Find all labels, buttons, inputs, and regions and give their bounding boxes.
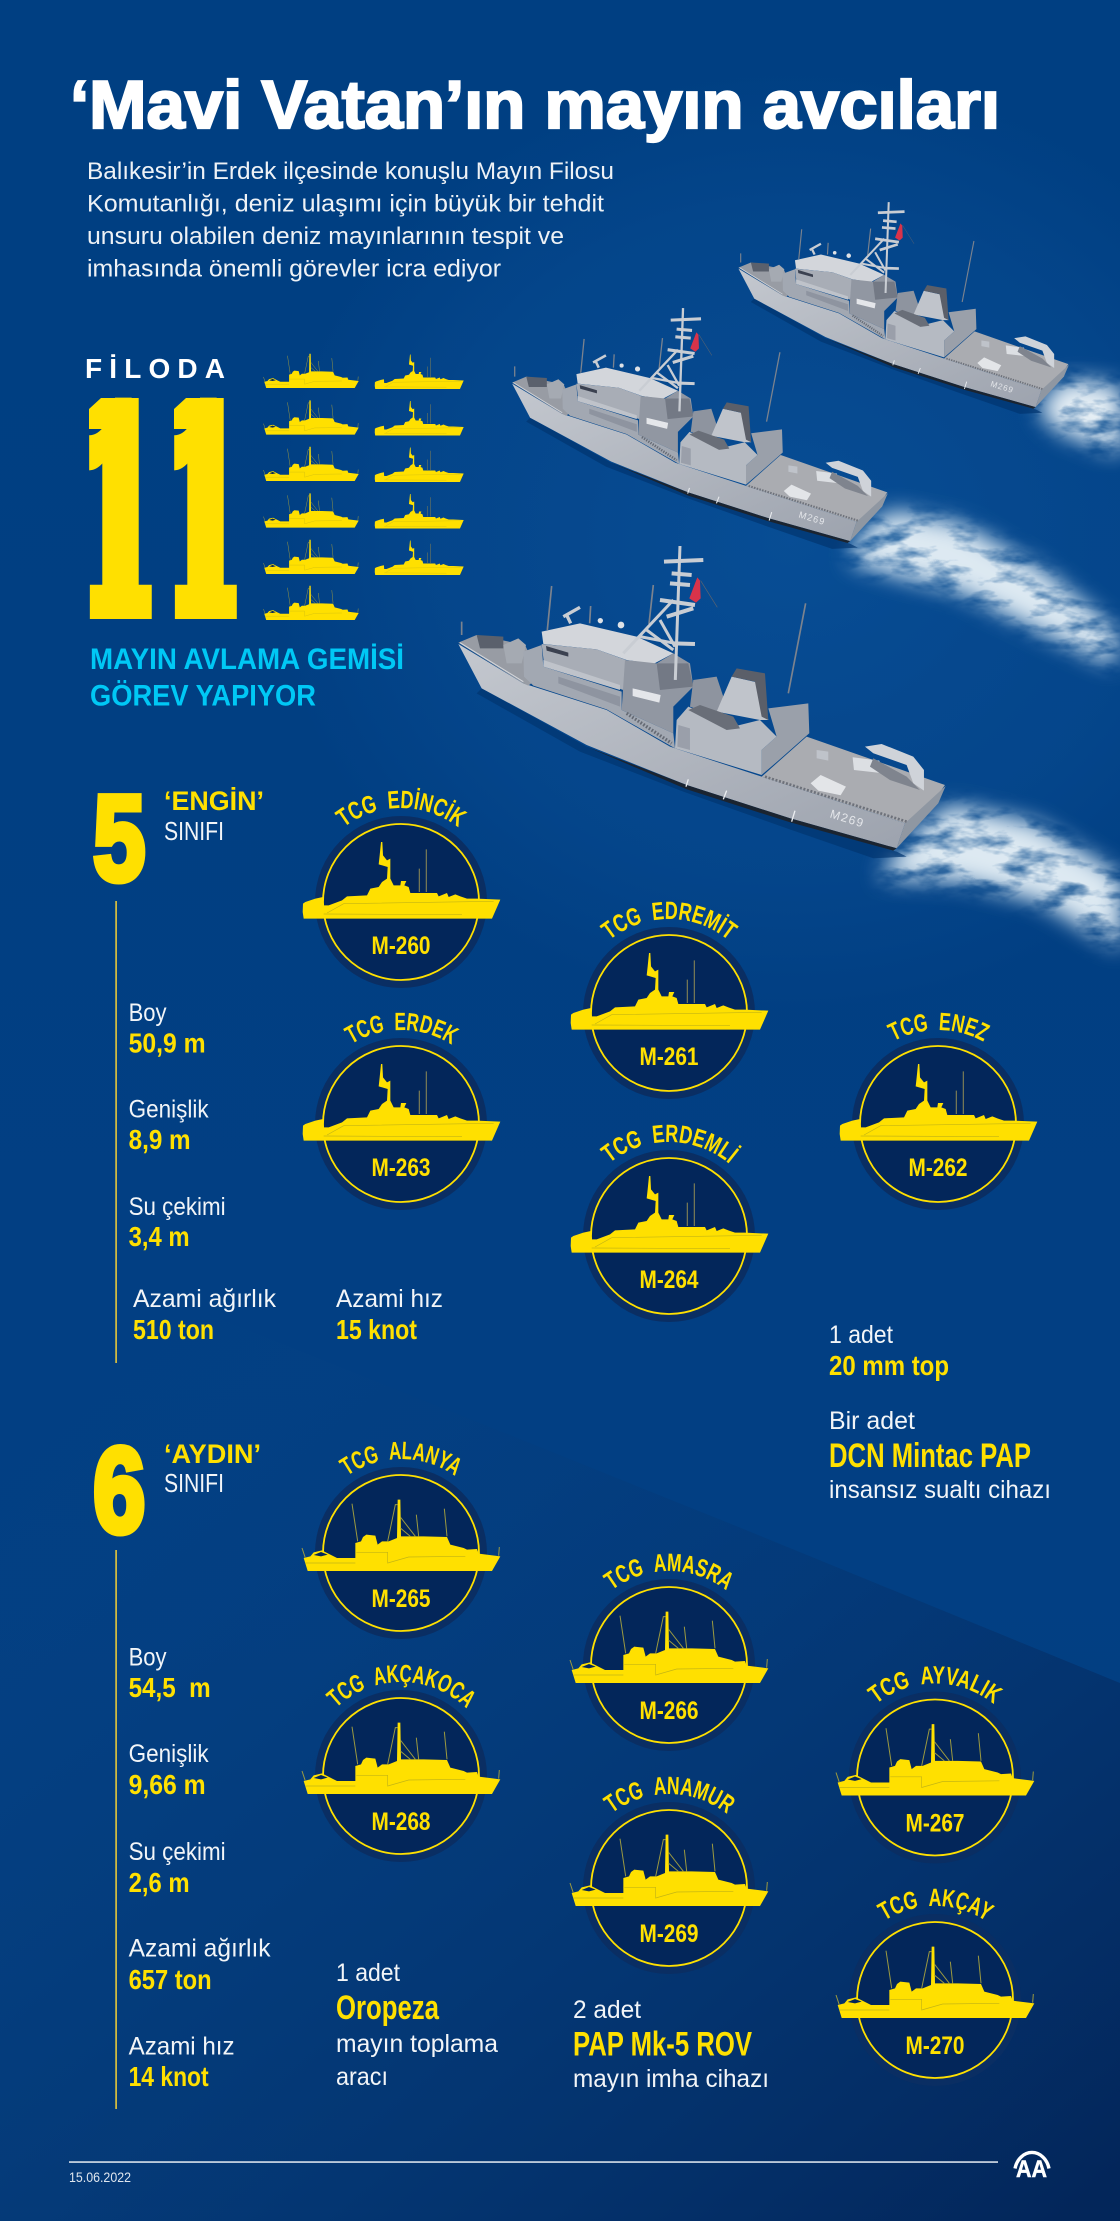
medallion: M-263 xyxy=(302,1012,500,1210)
lower right dark panel xyxy=(0,1230,1120,2221)
medallion: M-268: TCG AKÇAKOCA xyxy=(325,1664,474,1708)
equipment: Oropeza: aracı xyxy=(336,2063,388,2091)
Engin specifications: 50,9 m xyxy=(129,1027,206,1058)
medallion: M-268: M-268 xyxy=(372,1808,431,1836)
Engin specifications: 510 ton xyxy=(133,1314,214,1345)
armament: DCN Mintac PAP xyxy=(829,1407,1051,1504)
panel: Aydin class heading xyxy=(93,1422,261,1558)
fleet caption xyxy=(90,643,404,712)
date: 15.06.2022 xyxy=(69,2169,131,2185)
medallion: M-261 xyxy=(570,902,768,1099)
medallion: M-262: TCG ENEZ xyxy=(886,1012,990,1042)
Aydin specifications: Boy xyxy=(129,1644,167,1672)
equipment: Oropeza: Oropeza xyxy=(336,1989,440,2027)
Engin specifications xyxy=(129,999,443,1345)
logo: AA: AA xyxy=(1016,2156,1047,2183)
medallion: M-266 xyxy=(570,1554,768,1751)
intro text xyxy=(87,158,614,282)
medallion: M-261: TCG EDREMİT xyxy=(600,902,739,938)
medallion: M-267: TCG AYVALIK xyxy=(866,1666,1004,1704)
Aydin specifications: Genişlik xyxy=(129,1740,209,1768)
medallion: M-262 xyxy=(840,1012,1038,1210)
Aydin specifications: 14 knot xyxy=(129,2061,209,2092)
intro text: Komutanlığı, deniz ulaşımı için büyük bir tehdit xyxy=(87,190,604,218)
Engin specifications: Genişlik xyxy=(129,1096,209,1124)
equipment: PAP Mk-5 ROV: 2 adet xyxy=(573,1996,641,2024)
medallion: M-267: M-267 xyxy=(906,1810,964,1838)
panel: Aydin class heading: SINIFI xyxy=(164,1468,224,1498)
intro text: unsuru olabilen deniz mayınlarının tespit ve xyxy=(87,223,564,250)
armament: 20 mm gun xyxy=(829,1321,949,1381)
medallion: M-267 xyxy=(836,1666,1034,1864)
ship photo: M267 xyxy=(738,202,1069,414)
medallion: M-264 xyxy=(570,1124,768,1322)
medallion: M-262: M-262 xyxy=(908,1154,968,1182)
medallion: M-265: M-265 xyxy=(372,1585,431,1613)
intro text: imhasında önemli görevler icra ediyor xyxy=(87,256,501,282)
medallion: M-260: M-260 xyxy=(372,932,430,960)
equipment: PAP Mk-5 ROV: mayın imha cihazı xyxy=(573,2065,769,2093)
medallion: M-265 xyxy=(302,1442,500,1639)
medallion: M-260 xyxy=(302,788,500,988)
wake: ship two xyxy=(850,512,1114,665)
armament: DCN Mintac PAP: DCN Mintac PAP xyxy=(829,1437,1031,1475)
medallion: M-269: TCG ANAMUR xyxy=(602,1776,734,1814)
wake: ship one xyxy=(1039,380,1120,453)
medallion: M-269 xyxy=(570,1776,768,1974)
panel: Aydin class heading: ‘AYDIN’ xyxy=(164,1439,261,1469)
footer rule xyxy=(69,2161,998,2163)
Engin specifications: 8,9 m xyxy=(129,1124,191,1155)
Engin specifications: Su çekimi xyxy=(129,1193,226,1221)
Aydin specifications: 54,5 m xyxy=(129,1672,211,1703)
medallion: M-260: TCG EDİNCİK xyxy=(334,788,468,828)
panel: Engin class heading: 5 xyxy=(93,770,145,906)
panel: Engin class heading: SINIFI xyxy=(164,816,224,846)
Engin specifications: Azami hız xyxy=(336,1285,443,1313)
Aydin specifications: Azami hız xyxy=(129,2032,235,2060)
armament: DCN Mintac PAP: insansız sualtı cihazı xyxy=(829,1476,1051,1504)
Aydin specifications: Azami ağırlık xyxy=(129,1934,271,1962)
medallion: M-270: TCG AKÇAY xyxy=(876,1888,995,1919)
Aydin specifications xyxy=(129,1644,271,2092)
panel: Engin class heading: ‘ENGİN’ xyxy=(164,786,264,816)
medallion: M-263: TCG ERDEK xyxy=(343,1012,460,1045)
Engin specifications: Boy xyxy=(129,999,167,1027)
equipment: PAP Mk-5 ROV xyxy=(573,1996,769,2093)
intro text: Balıkesir’in Erdek ilçesinde konuşlu Mayın Filosu xyxy=(87,158,614,185)
medallion: M-266: TCG AMASRA xyxy=(602,1554,732,1590)
medallion: M-264: TCG ERDEMLİ xyxy=(600,1124,742,1164)
panel: Engin class heading xyxy=(93,770,264,906)
medallion: M-270 xyxy=(836,1888,1034,2079)
panel: Aydin class heading: 6 xyxy=(93,1422,145,1558)
Engin specifications: 15 knot xyxy=(336,1314,417,1345)
medallion: M-264: M-264 xyxy=(640,1266,699,1294)
fleet label: FİLODA xyxy=(85,353,225,384)
big number 11: 11 xyxy=(81,340,242,721)
sea glow behind ships xyxy=(270,70,1120,1010)
armament: 20 mm gun: 20 mm top xyxy=(829,1350,949,1381)
armament: DCN Mintac PAP: Bir adet xyxy=(829,1407,915,1435)
ship photo: M269 xyxy=(458,546,946,858)
wake: ship three xyxy=(880,806,1120,948)
Engin specifications: 3,4 m xyxy=(129,1221,190,1252)
Aydin specifications: Su çekimi xyxy=(129,1838,226,1866)
fleet caption: GÖREV YAPIYOR xyxy=(90,680,316,712)
wake haze xyxy=(850,380,1120,948)
Aydin specifications: 657 ton xyxy=(129,1964,212,1995)
armament: 20 mm gun: 1 adet xyxy=(829,1321,893,1349)
fleet ship icons xyxy=(263,354,464,620)
title: ‘Mavi Vatan’ın mayın avcıları xyxy=(70,67,1000,143)
medallion: M-270: M-270 xyxy=(906,2032,964,2060)
ship photo: M268 xyxy=(512,308,888,549)
medallion: M-265: TCG ALANYA xyxy=(338,1442,460,1476)
medallion: M-269: M-269 xyxy=(640,1920,698,1948)
medallion: M-266: M-266 xyxy=(640,1697,698,1725)
equipment: Oropeza: mayın toplama xyxy=(336,2030,498,2058)
medallion: M-268 xyxy=(302,1664,500,1862)
Aydin specifications: 9,66 m xyxy=(129,1769,206,1800)
Aydin specifications: 2,6 m xyxy=(129,1867,190,1898)
equipment: Oropeza xyxy=(336,1959,498,2091)
equipment: Oropeza: 1 adet xyxy=(336,1959,400,1987)
Engin specifications: Azami ağırlık xyxy=(133,1285,276,1313)
equipment: PAP Mk-5 ROV: PAP Mk-5 ROV xyxy=(573,2026,752,2064)
medallion: M-263: M-263 xyxy=(372,1154,430,1182)
medallion: M-261: M-261 xyxy=(640,1043,699,1071)
fleet caption: MAYIN AVLAMA GEMİSİ xyxy=(90,643,404,676)
